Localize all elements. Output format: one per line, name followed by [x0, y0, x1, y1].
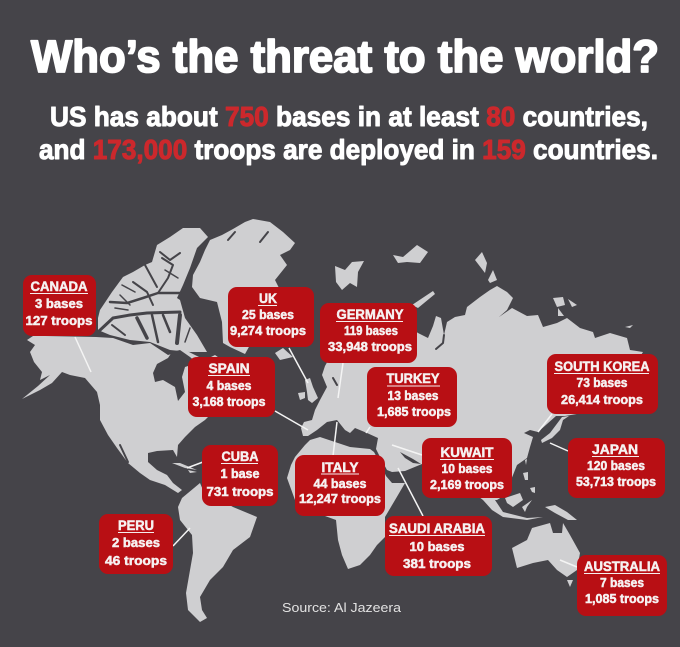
- callout: Peru: 2 bases: [112, 536, 160, 550]
- callout: South Korea: 26,414 troops: [561, 393, 643, 407]
- callout: Germany: 119 bases: [344, 324, 398, 338]
- callout: Australia: 7 bases: [600, 576, 644, 590]
- callout: Turkey: [367, 367, 457, 427]
- callout: Canada: [23, 275, 96, 336]
- leader lines: [75, 337, 577, 567]
- callout: Saudi Arabia: SAUDI ARABIA: [389, 521, 485, 536]
- callout: South Korea: 73 bases: [576, 376, 628, 390]
- callout: Saudi Arabia: 381 troops: [403, 557, 471, 571]
- callout: Spain: [188, 357, 275, 417]
- callout: Turkey: 1,685 troops: [377, 405, 451, 419]
- seas and channels: [98, 232, 444, 464]
- callout: Saudi Arabia: [385, 516, 492, 576]
- callout: Germany: GERMANY: [336, 307, 404, 322]
- callout: Turkey: TURKEY: [386, 371, 440, 386]
- callout: UK: 25 bases: [242, 308, 294, 322]
- callout: Italy: ITALY: [322, 460, 358, 475]
- callout: Japan: JAPAN: [592, 442, 638, 457]
- callout: Canada: 127 troops: [26, 314, 93, 328]
- callout: South Korea: [547, 354, 658, 414]
- callout: UK: UK: [259, 291, 277, 306]
- callout: Peru: 46 troops: [105, 554, 167, 568]
- callout: Kuwait: KUWAIT: [440, 445, 494, 460]
- callout: South Korea: SOUTH KOREA: [554, 359, 650, 374]
- callout: Canada: 3 bases: [35, 297, 83, 311]
- land masses: [22, 219, 643, 622]
- callout: Peru: [99, 514, 173, 574]
- callout: Cuba: [202, 445, 278, 506]
- callout: Italy: 12,247 troops: [299, 492, 381, 506]
- subtitle: [39, 101, 658, 165]
- callout: Spain: 4 bases: [206, 379, 252, 393]
- callout: Kuwait: 2,169 troops: [430, 478, 504, 492]
- callout: Kuwait: 10 bases: [442, 462, 493, 476]
- callout: Japan: 120 bases: [587, 459, 645, 473]
- subtitle: US has about 750 bases in at least 80 countries,: [50, 101, 648, 132]
- callout: Japan: [568, 438, 665, 498]
- title: Who’s the threat to the world?: [31, 31, 659, 82]
- callout: Spain: 3,168 troops: [192, 395, 266, 409]
- callout: UK: [228, 287, 314, 347]
- world map: [22, 219, 643, 622]
- callout: Germany: [320, 303, 417, 363]
- callout: Australia: AUSTRALIA: [584, 559, 660, 574]
- subtitle: and 173,000 troops are deployed in 159 countries.: [39, 134, 658, 165]
- callout: Cuba: 1 base: [220, 467, 260, 481]
- callout: Cuba: CUBA: [222, 449, 259, 464]
- callout: UK: 9,274 troops: [230, 324, 306, 338]
- callout: Germany: 33,948 troops: [328, 340, 412, 354]
- callout: Canada: CANADA: [30, 279, 88, 294]
- callout: Australia: [577, 555, 667, 616]
- callout: Japan: 53,713 troops: [576, 475, 656, 489]
- callout: Peru: PERU: [118, 518, 154, 533]
- source credit: Source: Al Jazeera: [282, 601, 401, 615]
- callout: Australia: 1,085 troops: [585, 592, 659, 606]
- callout: Italy: 44 bases: [314, 477, 367, 491]
- callout: Turkey: 13 bases: [388, 389, 439, 403]
- callout: Saudi Arabia: 10 bases: [410, 540, 465, 554]
- callout: Spain: SPAIN: [208, 361, 250, 376]
- callout: Kuwait: [422, 438, 512, 498]
- callout: Italy: [295, 455, 385, 516]
- callout: Cuba: 731 troops: [206, 485, 274, 499]
